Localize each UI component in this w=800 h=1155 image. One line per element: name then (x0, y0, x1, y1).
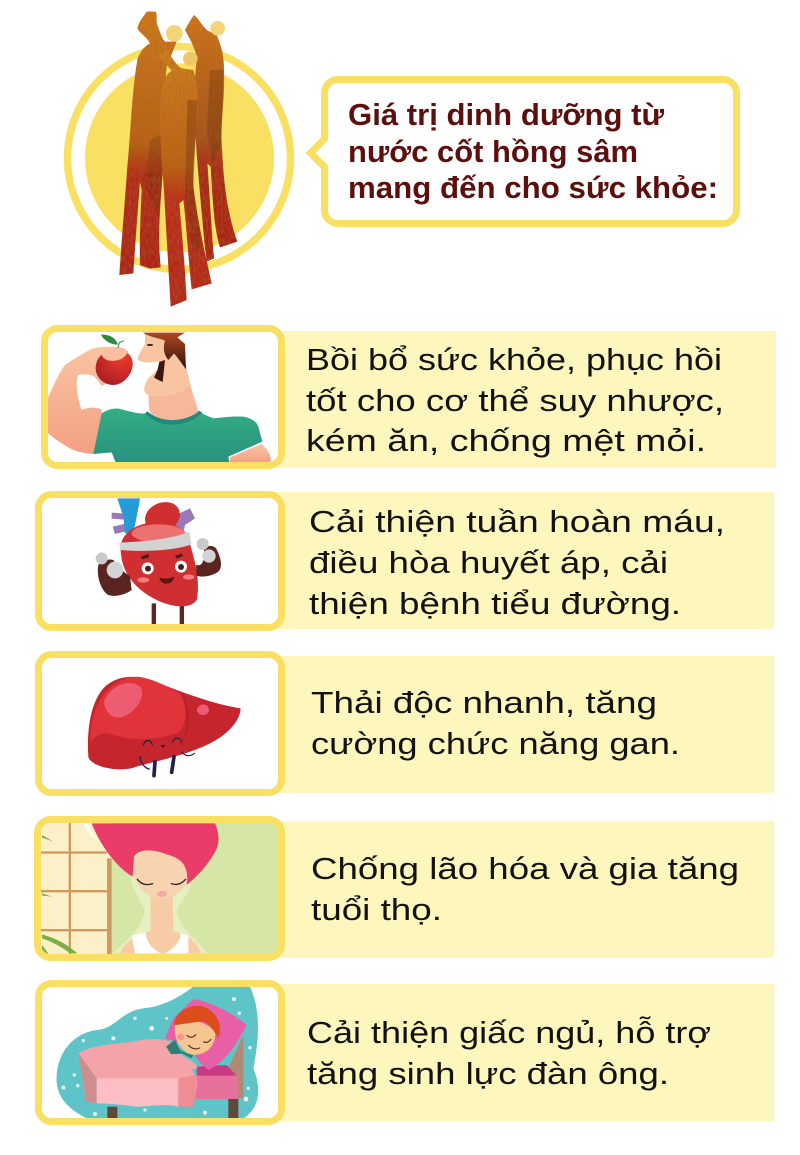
illustration: boy sleeping in bed (57, 987, 258, 1118)
illustration: muscular heart (96, 498, 221, 625)
panel: benefit 3 liver (38, 654, 774, 793)
benefit 2 text: Cải thiện tuần hoàn máu, (309, 504, 725, 539)
illustration: man eating apple (47, 333, 271, 463)
callout heading (348, 97, 718, 205)
benefit 5 text (307, 1015, 711, 1091)
benefit 5 text: Cải thiện giấc ngủ, hỗ trợ (307, 1015, 711, 1050)
benefit 3 text: cường chức năng gan. (311, 726, 680, 761)
benefit 4 text (311, 851, 739, 927)
benefit 2 text (309, 504, 725, 621)
illustration: smiling liver (88, 677, 241, 776)
benefit 5 text: tăng sinh lực đàn ông. (307, 1056, 669, 1091)
panel: benefit 5 sleeping boy (38, 984, 774, 1122)
benefit 4 text: tuổi thọ. (311, 892, 442, 927)
ginseng illustration with yellow circle (68, 12, 290, 307)
callout heading: nước cốt hồng sâm (348, 134, 638, 169)
benefit 2 text: thiện bệnh tiểu đường. (309, 586, 681, 621)
panel: benefit 2 heart (38, 492, 774, 629)
benefit 1 text: Bồi bổ sức khỏe, phục hồi (306, 342, 722, 377)
benefit 3 text: Thải độc nhanh, tăng (311, 685, 657, 720)
illustration: woman with pink hair (40, 822, 280, 955)
callout heading: Giá trị dinh dưỡng từ (348, 97, 665, 132)
benefit 1 text: tốt cho cơ thể suy nhược, (306, 383, 724, 418)
benefit 4 text: Chống lão hóa và gia tăng (311, 851, 739, 886)
panel: benefit 1 strength (44, 328, 776, 468)
benefit 3 text (311, 685, 680, 761)
benefit 1 text: kém ăn, chống mệt mỏi. (306, 423, 706, 458)
callout heading: mang đến cho sức khỏe: (348, 170, 718, 205)
callout box (310, 80, 736, 224)
benefit 2 text: điều hòa huyết áp, cải (309, 545, 668, 580)
benefit 1 text (306, 342, 724, 458)
panel: benefit 4 woman (38, 820, 774, 958)
